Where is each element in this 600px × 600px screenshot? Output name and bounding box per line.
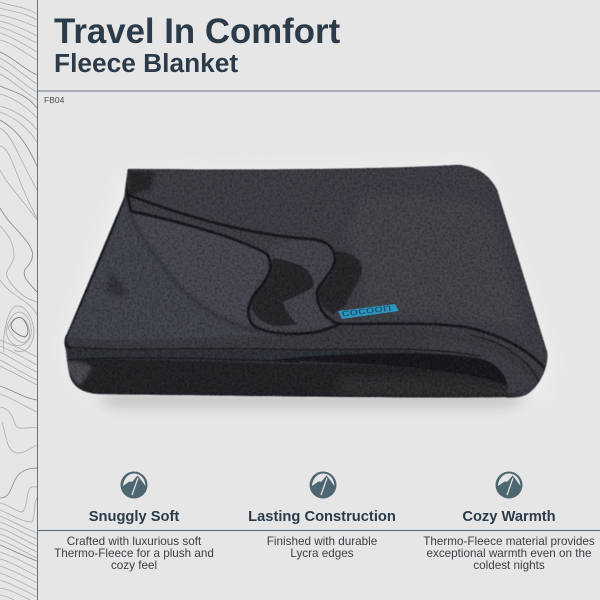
heading: Snuggly Soft: Snuggly Soft	[89, 509, 179, 525]
product code: FB04	[44, 95, 64, 105]
blanket body	[60, 160, 555, 405]
text: Snuggly Soft description: Crafted with luxurious soft	[67, 534, 201, 548]
inner fold lighter area	[259, 242, 330, 332]
text: Lasting Construction description	[267, 534, 377, 560]
binding edges	[65, 165, 547, 397]
label: cocoon tag	[338, 302, 399, 319]
left inner roll highlight	[66, 361, 92, 386]
topographic side strip	[0, 2, 37, 600]
fold band 1	[64, 337, 542, 378]
lower right band	[340, 377, 520, 398]
text: Cozy Warmth description: exceptional warmth even on the	[426, 546, 592, 560]
heading: Lasting Construction: Lasting Construction	[248, 509, 396, 525]
subtitle: Fleece Blanket	[54, 48, 238, 78]
title: Travel In Comfort	[54, 12, 340, 51]
text: Lasting Construction description: Finished with durable	[267, 534, 377, 548]
text: Cozy Warmth description: coldest nights	[473, 558, 545, 572]
dark crease	[270, 353, 506, 386]
lower left panel	[68, 204, 252, 340]
icon: mountain 3	[496, 472, 522, 498]
label: cocoon tag: cocoon	[341, 302, 392, 319]
text: Snuggly Soft description	[54, 534, 214, 572]
halo and shadow	[62, 165, 552, 400]
fold band 2	[65, 348, 438, 386]
text: Cozy Warmth description: Thermo-Fleece material provides	[423, 534, 595, 548]
shadow patch near label	[318, 251, 362, 314]
bottom layer	[60, 359, 512, 400]
top left dark shade	[128, 170, 155, 196]
icon: mountain 2	[310, 472, 336, 498]
text: Cozy Warmth description	[423, 534, 595, 572]
product photo: folded fleece blanket	[64, 164, 548, 411]
icon: mountain 1	[120, 472, 148, 498]
text: Lasting Construction description: Lycra edges	[290, 546, 354, 560]
flap	[130, 214, 271, 330]
heading: Cozy Warmth: Cozy Warmth	[462, 509, 556, 525]
fold lines	[66, 346, 490, 369]
right roll lighter area	[494, 366, 521, 394]
text: Snuggly Soft description: Thermo-Fleece for a plush and	[54, 546, 214, 560]
right upper panel sheen	[356, 200, 514, 320]
text: Snuggly Soft description: cozy feel	[111, 558, 157, 572]
inner fold dark crescent	[252, 258, 314, 326]
